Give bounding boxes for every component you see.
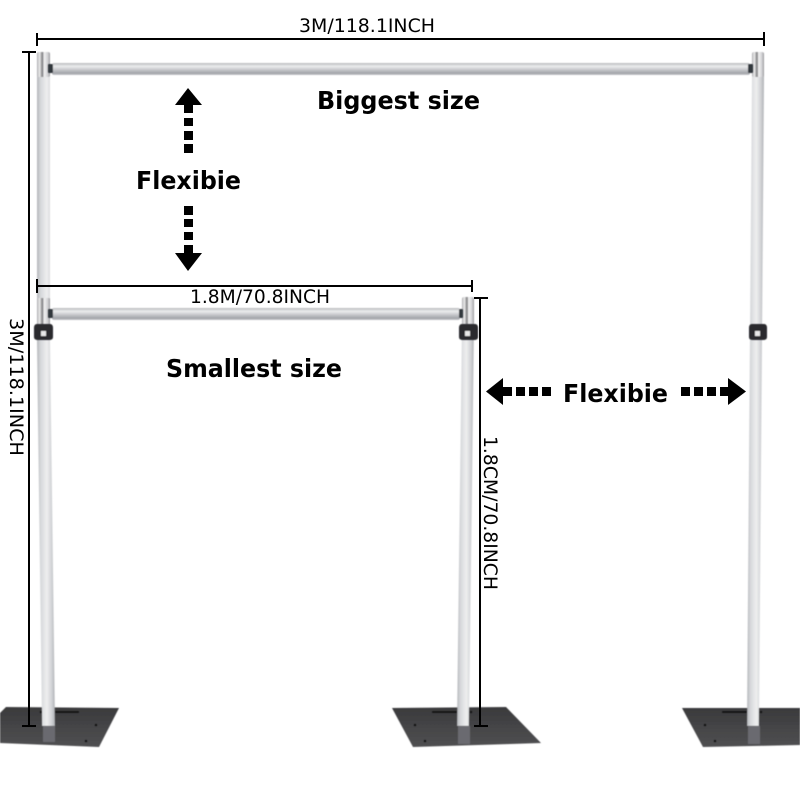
crossbar: smallest size: [48, 308, 463, 320]
dimension line: small width 1.8M: 1.8M/70.8INCH: [190, 287, 330, 308]
dimension line: top width 3M: [37, 16, 764, 46]
arrow: right: [681, 378, 746, 405]
label: vertical flexible: Flexibie: [136, 166, 241, 195]
clamp: right pole: [749, 324, 767, 340]
base plate: left: [0, 707, 119, 747]
dimension line: small width 1.8M: [37, 279, 472, 308]
clamp: left pole: [34, 324, 53, 340]
upright pole: left: [37, 52, 55, 726]
arrow: left: [486, 378, 551, 405]
label: horizontal flexible: Flexibie: [563, 379, 668, 408]
base plate: right: [682, 708, 800, 747]
crossbar: biggest size: [48, 63, 753, 75]
arrow: down: [175, 206, 202, 271]
dimension line: left height 3M: [5, 52, 36, 726]
upright pole: right: [747, 52, 764, 726]
dimension line: small height 1.8M: 1.8CM/70.8INCH: [479, 436, 500, 590]
dimension line: left height 3M: 3M/118.1INCH: [5, 318, 26, 456]
heading: biggest size: Biggest size: [317, 86, 480, 115]
upright pole: middle: [457, 297, 474, 726]
clamp: middle pole: [459, 324, 478, 340]
base plate: middle: [392, 707, 541, 747]
arrow: up: [175, 88, 202, 153]
heading: smallest size: Smallest size: [166, 354, 342, 383]
dimension line: top width 3M: 3M/118.1INCH: [299, 16, 435, 37]
dimension line: small height 1.8M: [474, 298, 500, 726]
